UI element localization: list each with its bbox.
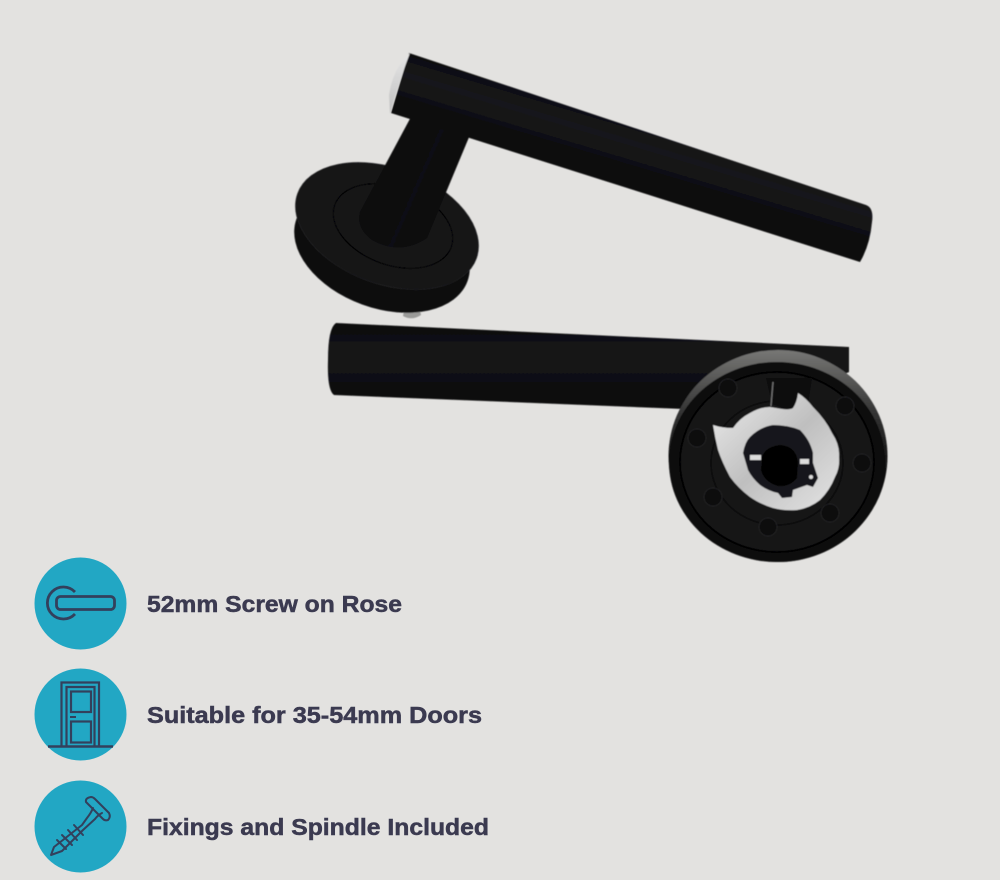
feature row: 52mm screw on rose <box>34 558 402 650</box>
lower door handle photo <box>328 323 888 562</box>
label: Fixings and Spindle Included: Fixings and Spindle Included <box>147 814 489 840</box>
spindle hole <box>743 425 818 498</box>
lever of lower handle <box>328 323 849 412</box>
lever of upper handle <box>389 53 872 262</box>
label: Suitable for 35-54mm Doors: Suitable for 35-54mm Doors <box>147 702 482 728</box>
lever cut end <box>389 53 410 114</box>
neck of upper handle <box>359 115 472 248</box>
upper door handle photo <box>277 53 872 336</box>
icon: door <box>34 668 126 760</box>
silver clip plate <box>713 393 839 510</box>
spindle opening <box>761 445 798 486</box>
icon: lever handle <box>34 558 126 650</box>
feature row: door thickness <box>34 668 482 760</box>
rose back of lower handle <box>668 350 888 562</box>
feature row: fixings <box>34 780 489 872</box>
screw recesses <box>688 379 871 536</box>
icon: screw <box>34 780 126 872</box>
clip notch above plate <box>766 378 812 410</box>
rose base of upper handle <box>277 139 496 336</box>
label: 52mm Screw on Rose: 52mm Screw on Rose <box>147 591 402 617</box>
